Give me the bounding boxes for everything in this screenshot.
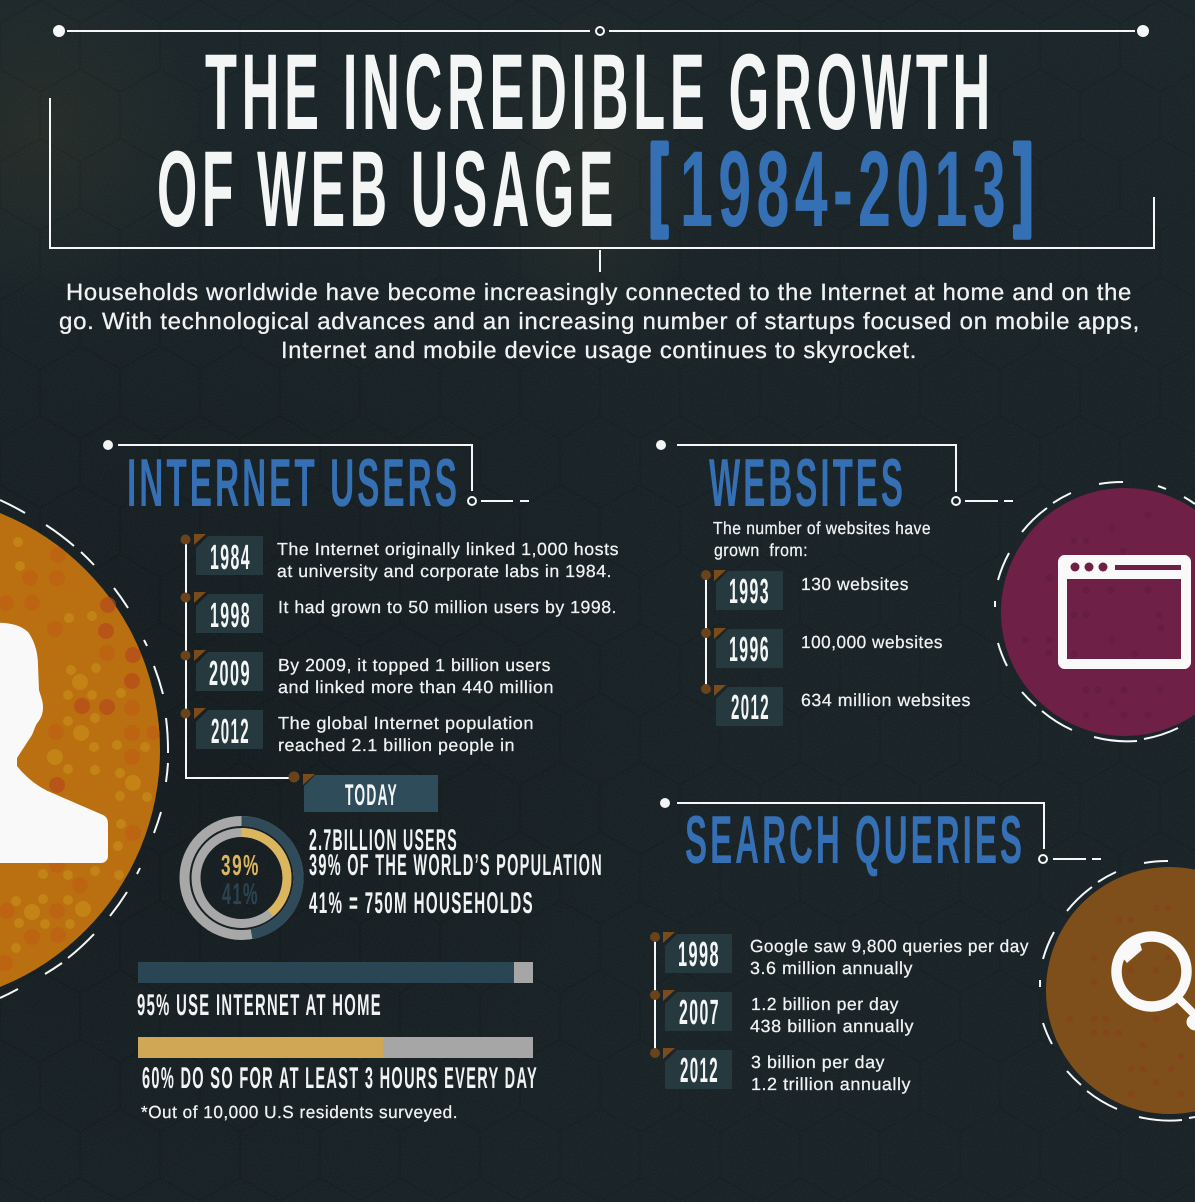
timeline item: 2009: By 2009, it topped 1 billion users <box>278 655 551 675</box>
websites intro: grown from: <box>714 540 808 560</box>
timeline item: 1998: 1998 <box>210 596 251 635</box>
timeline item: 2007: 1.2 billion per day <box>751 994 899 1014</box>
timeline item: 2012 <box>701 684 971 727</box>
timeline item: 2012: 1.2 trillion annually <box>751 1074 911 1094</box>
panel: internet users: 39% OF THE WORLD’S POPULATION <box>309 849 603 882</box>
timeline item: 2009: 2009 <box>209 654 251 693</box>
timeline item: 2009 <box>180 650 554 697</box>
timeline item: 1984 <box>180 534 619 581</box>
bar: 95% at home: 95% USE INTERNET AT HOME <box>137 989 382 1022</box>
panel: websites: WEBSITES <box>709 445 906 521</box>
timeline item: 1993 <box>701 570 909 611</box>
timeline line <box>186 540 292 778</box>
timeline item: 1998: 1998 <box>678 935 720 974</box>
intro paragraph: Internet and mobile device usage continues to skyrocket. <box>281 337 917 363</box>
intro paragraph: Households worldwide have become increasingly connected to the Internet at home and on the <box>66 279 1132 305</box>
timeline item: 1996: 100,000 websites <box>801 632 943 652</box>
today label <box>288 772 438 812</box>
timeline item: 2009: and linked more than 440 million <box>278 677 554 697</box>
dashed ring: search circle <box>1040 861 1195 1121</box>
timeline item: 1993: 130 websites <box>801 574 909 594</box>
intro paragraph: go. With technological advances and an increasing number of startups focused on mobile apps, <box>59 308 1140 334</box>
timeline item: 1998 <box>650 932 1029 978</box>
bar: 95% at home <box>137 962 533 1022</box>
panel: internet users <box>103 440 619 1122</box>
timeline item: 1998: 3.6 million annually <box>750 958 913 978</box>
title: ] <box>1014 126 1038 238</box>
websites intro <box>713 518 931 560</box>
intro paragraph <box>59 279 1140 363</box>
timeline item: 2012: The global Internet population <box>278 713 534 733</box>
footnote: *Out of 10,000 U.S residents surveyed. <box>141 1102 458 1122</box>
bar: 60% three hours <box>138 1037 538 1095</box>
heading bracket: websites <box>656 440 1013 505</box>
timeline item: 1996 <box>701 628 943 669</box>
timeline item: 1984: at university and corporate labs in 1984. <box>277 561 612 581</box>
timeline item: 1998: It had grown to 50 million users by 1998. <box>278 597 617 617</box>
timeline item: 2012 <box>180 708 534 755</box>
timeline item: 2012 <box>650 1048 911 1094</box>
icon: magnifying glass <box>1116 936 1195 1023</box>
timeline item: 2007 <box>650 990 914 1036</box>
timeline item: 2012: 2012 <box>680 1051 719 1090</box>
heading bracket: search queries <box>660 798 1101 863</box>
heading bracket: internet users <box>103 440 529 505</box>
dashed ring: websites circle <box>995 482 1195 741</box>
timeline item: 1984: The Internet originally linked 1,000 hosts <box>277 539 619 559</box>
icon: orange user circle <box>0 494 160 1006</box>
timeline item: 2012: 634 million websites <box>801 690 971 710</box>
timeline item: 1998: Google saw 9,800 queries per day <box>750 936 1029 956</box>
panel: search queries <box>650 798 1195 1121</box>
dashed ring: orange circle <box>0 500 168 998</box>
timeline line <box>654 938 656 1053</box>
timeline item: 1998 <box>180 592 617 635</box>
timeline item: 2012: reached 2.1 billion people in <box>278 735 515 755</box>
today label: TODAY <box>345 779 398 812</box>
title: OF WEB USAGE <box>157 128 618 249</box>
timeline item: 2012: 2012 <box>731 688 770 727</box>
icon: magnifier circle <box>1046 867 1195 1114</box>
timeline item: 1993: 1993 <box>729 572 770 611</box>
donut chart: 39% <box>221 850 260 882</box>
header frame <box>50 25 1154 272</box>
title: [ <box>649 126 673 238</box>
timeline item: 2012: 2012 <box>211 712 250 751</box>
panel: internet users: INTERNET USERS <box>127 445 460 521</box>
timeline item: 2007: 2007 <box>679 993 720 1032</box>
today statistics <box>309 824 603 920</box>
websites intro: The number of websites have <box>713 518 931 538</box>
donut chart <box>184 821 298 935</box>
today statistics: 41% = 750M HOUSEHOLDS <box>309 887 534 920</box>
icon: browser window circle <box>1001 488 1195 736</box>
donut chart: 41% <box>222 878 259 911</box>
panel: websites <box>656 440 1195 741</box>
today statistics: 2.7BILLION USERS <box>309 824 458 857</box>
timeline item: 1984: 1984 <box>210 538 251 577</box>
timeline item: 1996: 1996 <box>729 630 770 669</box>
panel: internet users: 60% DO SO FOR AT LEAST 3 HOURS EVERY DAY <box>142 1062 538 1095</box>
icon: browser window <box>1058 555 1191 669</box>
timeline item: 2012: 3 billion per day <box>751 1052 885 1072</box>
timeline item: 2007: 438 billion annually <box>750 1016 914 1036</box>
title <box>157 31 1038 249</box>
icon: user silhouette <box>0 623 108 863</box>
timeline line <box>705 576 707 690</box>
